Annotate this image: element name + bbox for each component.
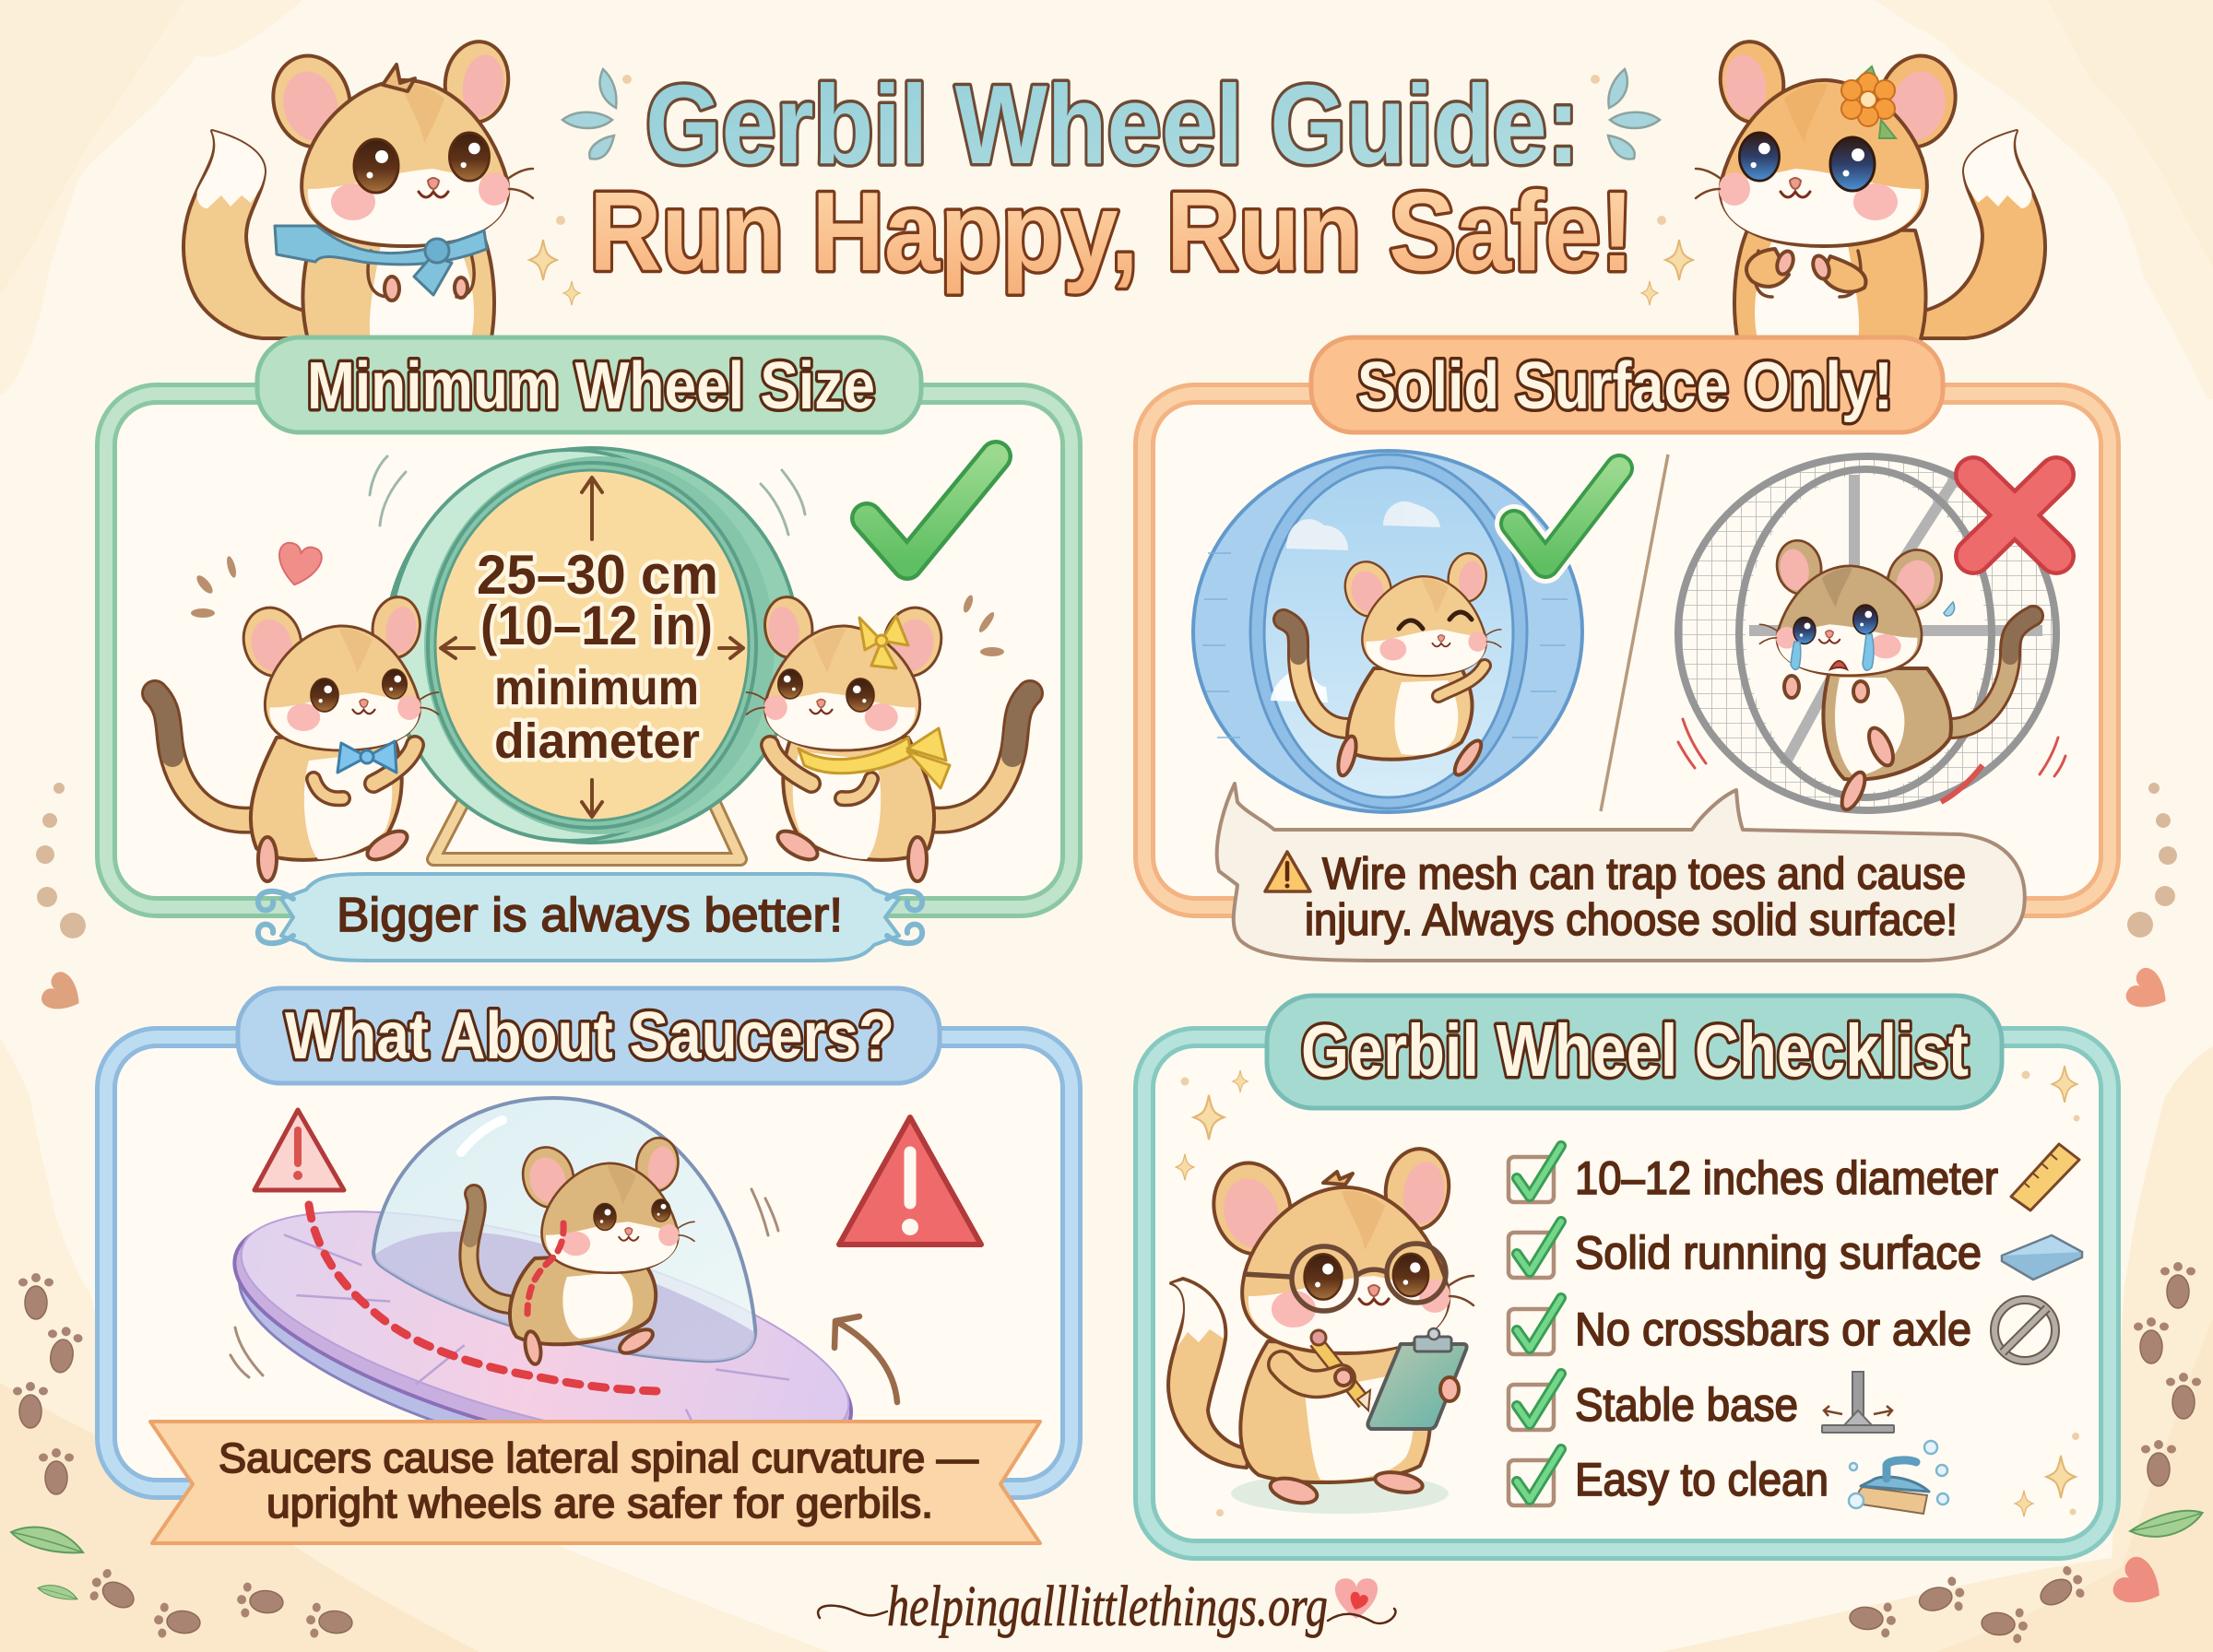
- decorative hearts: [38, 964, 2176, 1616]
- crying gerbil: [1759, 537, 2033, 813]
- arm: [1282, 1364, 1342, 1384]
- checklist item: easy to clean: [1509, 1441, 1948, 1514]
- panel: minimum wheel size: [106, 337, 1071, 961]
- icon: ruler: [2011, 1144, 2079, 1210]
- gerbil mascot with blue scarf: [183, 38, 533, 343]
- header pill: [238, 988, 940, 1083]
- icon: scrub brush: [1849, 1441, 1948, 1514]
- panel frame: [1144, 394, 2110, 907]
- speech bubble warning: injury. Always choose solid surface!: [1305, 896, 1958, 945]
- icon: prohibited sign: [1994, 1300, 2055, 1361]
- header pill: Solid Surface Only!: [1357, 349, 1893, 423]
- heart: [1335, 1578, 1378, 1619]
- yellow scarf: [799, 728, 950, 788]
- worried gerbil: [468, 1135, 694, 1365]
- warning icon: [1265, 852, 1310, 891]
- icon: slab: [2002, 1235, 2082, 1280]
- spine curve dashed line: [309, 1205, 657, 1391]
- leaves: [11, 1495, 2205, 1599]
- panel: what about saucers: [106, 988, 1071, 1543]
- gerbil with bowtie: [155, 594, 439, 881]
- spokes: [1749, 475, 2042, 765]
- title decorations left: [529, 69, 632, 305]
- bowtie: [337, 741, 396, 773]
- checklist item: solid running surface: Solid running surface: [1575, 1227, 1982, 1279]
- sparkles: [1176, 1066, 2080, 1516]
- dimension arrows: [441, 478, 743, 817]
- divider: [1601, 454, 1668, 811]
- gerbil mascot with flower: [1696, 38, 2045, 343]
- header pill: [1267, 996, 2002, 1108]
- head: [1203, 1145, 1473, 1353]
- motion lines: [231, 1189, 778, 1377]
- warning text: Wire mesh can trap toes and cause: [1322, 850, 1966, 899]
- panel frame: [106, 394, 1071, 907]
- header pill: Minimum Wheel Size: [307, 349, 875, 423]
- decorative dots right: [2127, 783, 2177, 938]
- clouds: [1271, 502, 1440, 702]
- clipboard: [1367, 1344, 1467, 1429]
- pencil: [1316, 1341, 1365, 1403]
- paw prints left: [13, 1273, 354, 1641]
- title: [529, 62, 1693, 305]
- checklist item: no crossbars: No crossbars or axle: [1575, 1304, 1971, 1355]
- paw prints right: [1848, 1262, 2201, 1644]
- dome: [373, 1098, 755, 1361]
- glasses: [1243, 1244, 1446, 1311]
- wheel with dimension label: [385, 448, 799, 843]
- tail: [1168, 1279, 1249, 1468]
- header pill: [257, 337, 921, 432]
- checklist item: stable base: [1509, 1372, 1894, 1433]
- body: [1240, 1341, 1430, 1482]
- wheel with dimension label: diameter: [494, 714, 700, 769]
- large warning triangle: [839, 1117, 981, 1245]
- title decorations right: [1591, 69, 1693, 305]
- flourish: [818, 1606, 1395, 1623]
- wheel with dimension label: minimum: [494, 660, 699, 715]
- caption ribbon: [258, 874, 922, 961]
- site url: helpingalllittlethings.org: [887, 1575, 1328, 1638]
- caption banner: [150, 1422, 1040, 1543]
- gerbil with yellow bow: [747, 594, 1030, 881]
- header pill: Gerbil Wheel Checklist: [1301, 1009, 1969, 1092]
- caption banner: Saucers cause lateral spinal curvature —: [219, 1434, 978, 1481]
- checklist item: no crossbars: [1509, 1298, 2055, 1361]
- checklist item: solid running surface: [1509, 1221, 2082, 1280]
- panel: gerbil wheel checklist: [1144, 996, 2110, 1550]
- diameter text: 25–30 cm: [477, 544, 718, 606]
- spine dashes: [527, 1223, 563, 1314]
- cheer marks: [191, 555, 1004, 656]
- icon: stand base: [1822, 1372, 1894, 1433]
- saucer: [207, 1162, 875, 1528]
- checklist item: easy to clean: Easy to clean: [1575, 1454, 1828, 1505]
- caption ribbon: Bigger is always better!: [337, 889, 843, 942]
- curved arrow: [834, 1316, 897, 1402]
- heart: [274, 541, 324, 589]
- small warning triangle: [254, 1110, 344, 1190]
- checklist item: diameter: [1509, 1144, 2079, 1210]
- panel frame: [106, 1037, 1071, 1489]
- checklist item: diameter: 10–12 inches diameter: [1575, 1152, 1998, 1204]
- motion lines: [370, 456, 805, 535]
- wheel with dimension label: (10–12 in): [480, 595, 713, 656]
- solid blue wheel: [1193, 451, 1582, 812]
- gerbil with clipboard: [1168, 1145, 1473, 1514]
- check mark: [1514, 468, 1619, 564]
- checklist item: stable base: Stable base: [1575, 1379, 1798, 1431]
- panel: solid surface only: [1144, 337, 2110, 961]
- happy gerbil: [1284, 550, 1501, 779]
- yellow bow: [859, 616, 908, 668]
- panel frame: [1144, 1037, 2110, 1550]
- red cross: [1973, 475, 2056, 556]
- title line 2: Run Happy, Run Safe!: [589, 169, 1634, 294]
- caption banner: upright wheels are safer for gerbils.: [266, 1480, 933, 1527]
- header pill: What About Saucers?: [285, 999, 894, 1073]
- speech bubble warning: [1217, 784, 2025, 961]
- header pill: [1311, 337, 1943, 432]
- wheel stand: [433, 797, 740, 859]
- title line 1: Gerbil Wheel Guide:: [645, 62, 1580, 187]
- check mark: [867, 456, 996, 564]
- decorative dots left: [36, 783, 86, 938]
- footer website: [818, 1575, 1395, 1638]
- wire mesh wheel: [1678, 456, 2065, 811]
